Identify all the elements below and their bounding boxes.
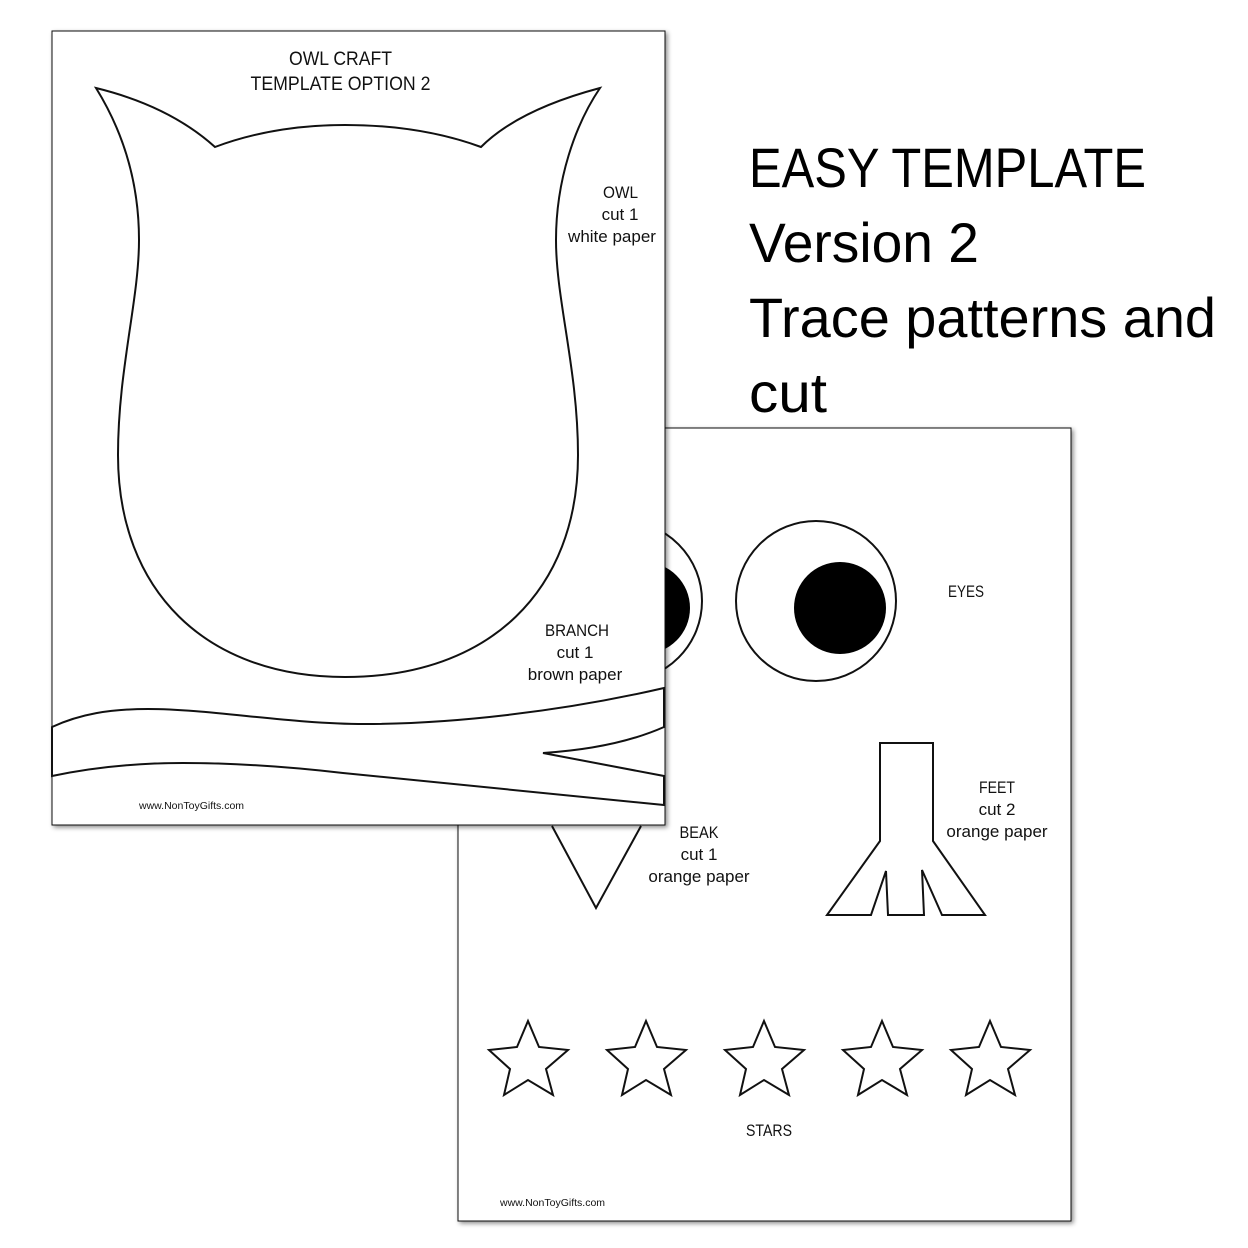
panel: owl template sheet — [52, 31, 665, 825]
label: beak — [648, 823, 750, 886]
icon: stars — [489, 1021, 1030, 1095]
label: feet — [946, 778, 1048, 841]
panel: parts template sheet — [458, 428, 1071, 1221]
icon: right eye — [736, 521, 896, 681]
label: stars: STARS — [746, 1121, 792, 1140]
heading: easy template: EASY TEMPLATE — [749, 136, 1146, 199]
label: beak: orange paper — [648, 867, 750, 886]
label: branch: cut 1 — [557, 643, 593, 662]
label: feet: orange paper — [946, 822, 1048, 841]
label: branch — [528, 621, 623, 684]
heading: easy template: cut — [749, 361, 827, 424]
title — [250, 49, 430, 95]
website credit: www.NonToyGifts.com — [499, 1197, 605, 1209]
label: owl: OWL — [603, 183, 638, 202]
title: OWL CRAFT — [289, 49, 392, 70]
label: owl — [567, 183, 656, 246]
label: branch: brown paper — [528, 665, 623, 684]
website credit: www.NonToyGifts.com — [138, 800, 244, 812]
icon: left eye — [542, 521, 702, 681]
icon: beak — [552, 826, 641, 908]
label: owl: white paper — [567, 227, 656, 246]
heading: easy template — [749, 136, 1216, 424]
label: feet: FEET — [979, 778, 1015, 797]
icon: feet — [827, 743, 985, 915]
label: beak: cut 1 — [681, 845, 717, 864]
label: beak: BEAK — [680, 823, 719, 842]
heading: easy template: Version 2 — [749, 211, 979, 274]
label: branch: BRANCH — [545, 621, 609, 640]
label: feet: cut 2 — [979, 800, 1015, 819]
icon: branch — [52, 688, 664, 805]
label: eyes: EYES — [948, 582, 984, 601]
heading: easy template: Trace patterns and — [749, 286, 1216, 349]
label: owl: cut 1 — [602, 205, 638, 224]
title: TEMPLATE OPTION 2 — [250, 74, 430, 95]
icon: owl body outline — [96, 88, 600, 677]
